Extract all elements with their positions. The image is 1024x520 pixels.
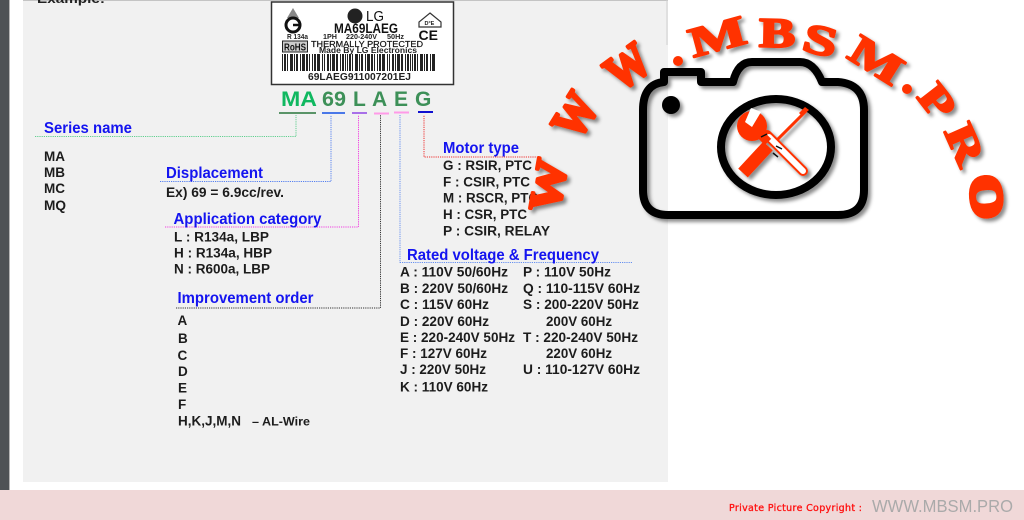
electrical ratings: 1PH xyxy=(323,34,337,41)
watermark: arched site name: W xyxy=(519,155,578,216)
section: rated voltage and frequency: J : 220V 50Hz xyxy=(400,362,486,377)
footer copyright note: Private Picture Copyright : xyxy=(729,503,862,514)
section: rated voltage and frequency: Q : 110-115V 60Hz xyxy=(523,281,640,296)
watermark: arched site name: B xyxy=(759,10,796,57)
leader lines xyxy=(35,115,632,308)
section: rated voltage and frequency: A : 110V 50/60Hz xyxy=(400,264,508,280)
section: series name xyxy=(44,120,132,213)
barcode digits: 69LAEG911007201EJ xyxy=(308,72,411,83)
section: improvement order: E xyxy=(178,380,187,396)
section: improvement order: Improvement order xyxy=(178,290,314,307)
section: motor type: M : RSCR, PTC xyxy=(443,190,538,206)
section: displacement xyxy=(166,165,284,200)
section: improvement order xyxy=(178,290,314,428)
section: rated voltage and frequency: Rated voltage & Frequency xyxy=(407,247,599,264)
watermark: arched site name: O xyxy=(960,173,1013,220)
section: series name: Series name xyxy=(44,120,132,137)
electrical ratings: 220-240V xyxy=(346,34,377,41)
icon: screwdriver and wrench xyxy=(737,107,809,173)
section: application category: L : R134a, LBP xyxy=(174,230,269,244)
model code letters: E xyxy=(394,88,408,111)
section: motor type: Motor type xyxy=(443,140,519,157)
section: series name: MA xyxy=(44,149,65,164)
watermark: arched site name: P xyxy=(908,74,965,129)
icon: RoHS badge: RoHS xyxy=(284,42,306,54)
section: series name: MB xyxy=(44,165,65,180)
watermark: arched site name: S xyxy=(798,14,842,67)
product nameplate label xyxy=(272,2,454,84)
panel: document background xyxy=(23,0,668,482)
section: rated voltage and frequency xyxy=(400,247,640,394)
section: application category: N : R600a, LBP xyxy=(174,262,270,276)
section: rated voltage and frequency: T : 220-240V 50Hz xyxy=(523,330,638,345)
icon: CE mark: CE xyxy=(418,27,438,43)
icon: camera with tools xyxy=(643,62,864,215)
barcode xyxy=(282,54,436,71)
section: rated voltage and frequency: 200V 60Hz xyxy=(546,314,612,329)
section: improvement order: H,K,J,M,N xyxy=(178,414,241,428)
left window strip xyxy=(0,0,9,490)
electrical ratings: 50Hz xyxy=(387,34,405,41)
watermark: arched site name: M xyxy=(840,26,912,95)
electrical ratings xyxy=(287,34,405,41)
section: rated voltage and frequency: S : 200-220V 50Hz xyxy=(523,297,639,312)
section: improvement order: F xyxy=(178,397,186,412)
section: rated voltage and frequency: E : 220-240V 50Hz xyxy=(400,330,515,345)
watermark: arched site name xyxy=(519,7,1013,220)
icon: LG logo: LG xyxy=(366,8,384,25)
model code letters: A xyxy=(372,88,387,111)
watermark: arched site name: R xyxy=(935,116,995,173)
section: improvement order: – AL-Wire xyxy=(252,414,310,428)
icon: G certification mark xyxy=(286,8,300,32)
model code letters: 69 xyxy=(322,88,346,111)
section: motor type xyxy=(443,140,550,238)
electrical ratings: R 134a xyxy=(287,34,308,41)
section: motor type: F : CSIR, PTC xyxy=(443,174,530,190)
watermark: arched site name: W xyxy=(594,33,661,102)
section: improvement order: C xyxy=(178,348,188,363)
section: rated voltage and frequency: D : 220V 60Hz xyxy=(400,314,489,329)
icon: certification triangle: D°E xyxy=(424,21,435,27)
section: application category xyxy=(174,211,322,276)
section: rated voltage and frequency: F : 127V 60Hz xyxy=(400,346,487,361)
model code letters: G xyxy=(415,88,431,111)
section: rated voltage and frequency: P : 110V 50Hz xyxy=(523,264,611,280)
icon: LG logo xyxy=(348,8,384,25)
manufacturer text: Made By LG Electronics xyxy=(319,46,418,55)
section: rated voltage and frequency: U : 110-127V 60Hz xyxy=(523,362,640,377)
section: improvement order: D xyxy=(178,364,188,379)
section: series name: MC xyxy=(44,181,65,196)
model code letters: L xyxy=(353,88,366,111)
section: improvement order: B xyxy=(178,331,188,346)
section: displacement: Displacement xyxy=(166,165,263,182)
section: motor type: P : CSIR, RELAY xyxy=(443,224,550,238)
section: application category: Application category xyxy=(174,211,322,228)
thermal protection text: THERMALLY PROTECTED xyxy=(311,39,423,49)
section: application category: H : R134a, HBP xyxy=(174,246,272,260)
section: rated voltage and frequency: B : 220V 50/60Hz xyxy=(400,281,508,296)
icon: certification triangle xyxy=(419,13,441,27)
model code letters xyxy=(281,88,431,111)
model code letters: MA xyxy=(281,88,317,111)
section: rated voltage and frequency: K : 110V 60Hz xyxy=(400,380,488,394)
section: series name: MQ xyxy=(44,198,66,213)
watermark: arched site name: W xyxy=(541,83,610,148)
section: improvement order: A xyxy=(178,313,188,328)
section: displacement: Ex) 69 = 6.9cc/rev. xyxy=(166,185,284,200)
section: motor type: H : CSR, PTC xyxy=(443,207,527,222)
footer band xyxy=(0,490,1024,520)
model name: MA69LAEG xyxy=(334,21,398,36)
section: rated voltage and frequency: 220V 60Hz xyxy=(546,346,612,361)
watermark: arched site name: M xyxy=(684,7,751,67)
section: rated voltage and frequency: C : 115V 60Hz xyxy=(400,297,489,312)
code underlines xyxy=(279,112,433,114)
section: motor type: G : RSIR, PTC xyxy=(443,158,532,173)
footer site name: WWW.MBSM.PRO xyxy=(872,496,1013,516)
